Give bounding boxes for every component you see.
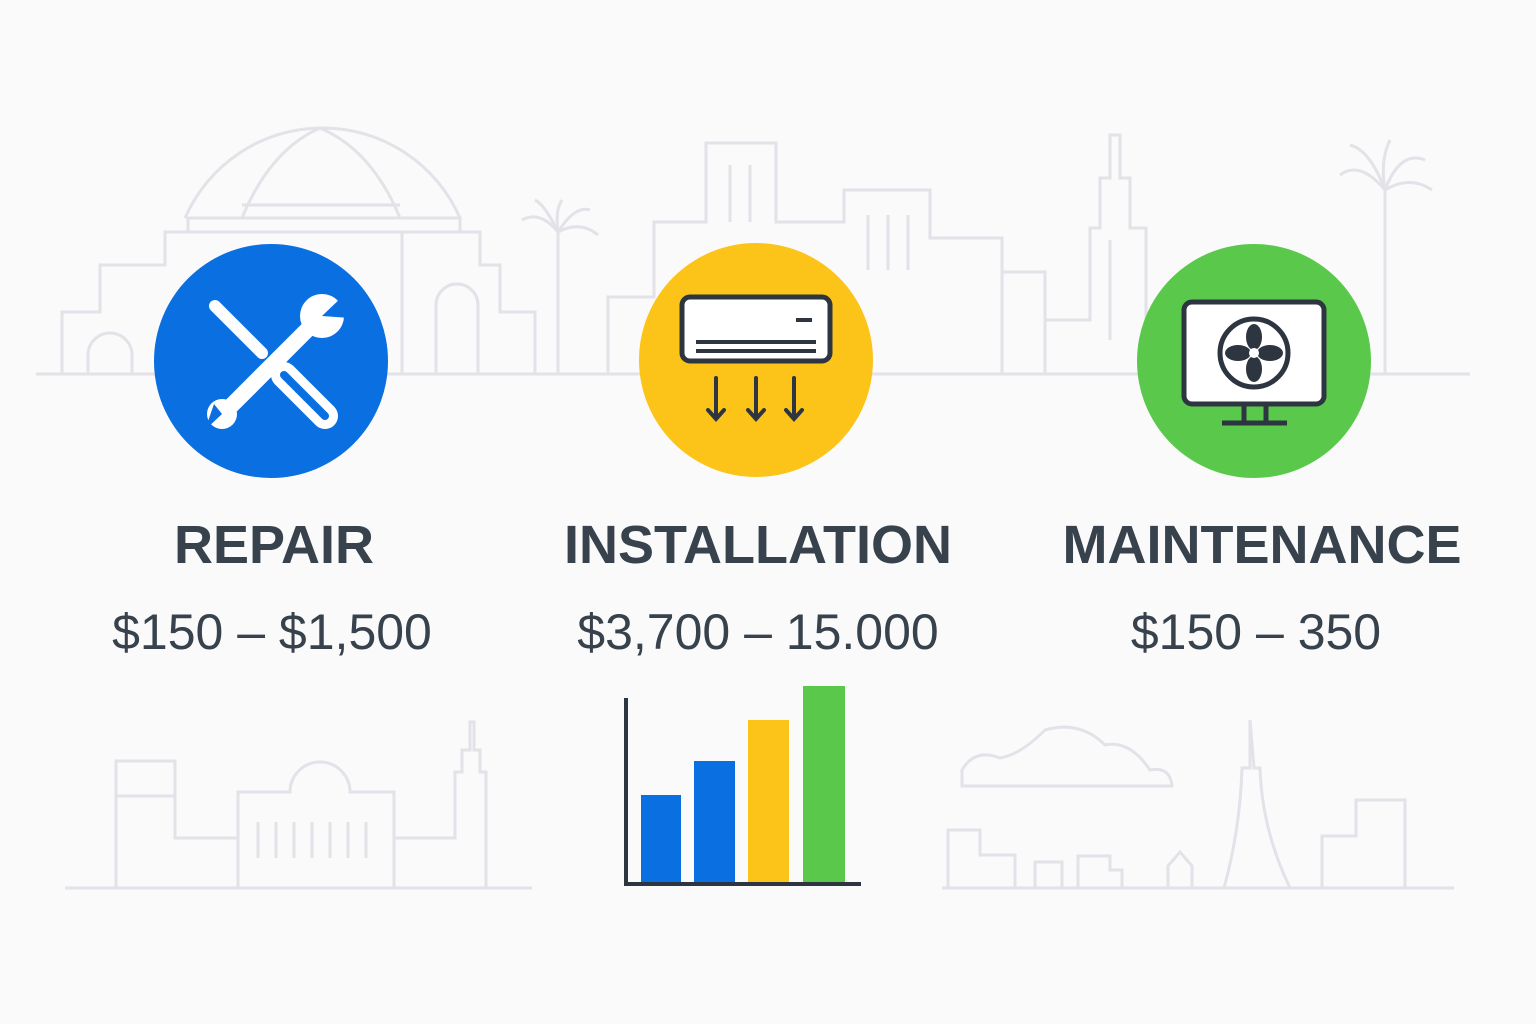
icon: installation [639, 243, 873, 477]
price: installation: $3,700 – 15.000 [577, 604, 939, 660]
icon: repair [154, 244, 388, 478]
bar chart [626, 686, 861, 884]
skyline background bottom left [65, 722, 532, 888]
price: repair: $150 – $1,500 [112, 604, 432, 660]
heading: maintenance: MAINTENANCE [1062, 515, 1462, 575]
heading: repair: REPAIR [174, 515, 374, 575]
price: maintenance: $150 – 350 [1131, 604, 1381, 660]
heading: installation: INSTALLATION [564, 515, 952, 575]
icon: maintenance [1137, 244, 1371, 478]
skyline background bottom right [942, 720, 1454, 888]
skyline background top [36, 128, 1470, 374]
